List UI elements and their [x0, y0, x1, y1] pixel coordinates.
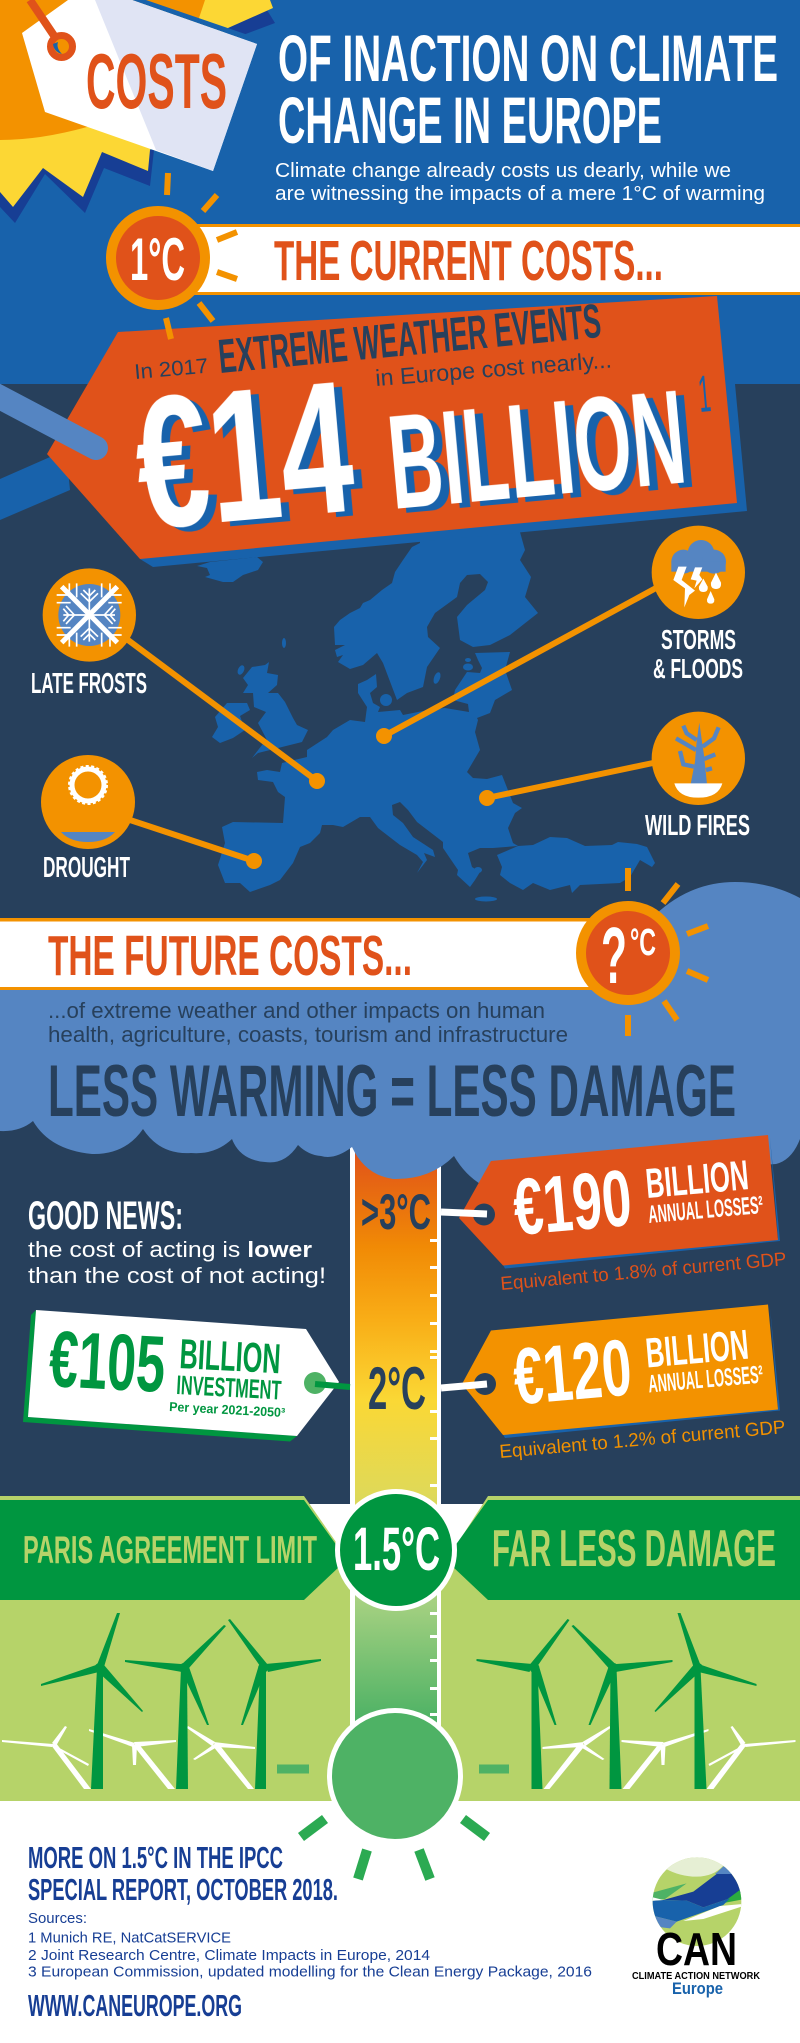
sun with costs price tag: COSTS: [86, 37, 227, 125]
icon: wild fires tree: [652, 712, 745, 805]
gdp note: 1.2%: Equivalent to 1.2% of current GDP: [499, 1417, 786, 1463]
label: storms and floods: STORMS: [661, 624, 736, 655]
price tag: extreme weather events: 1: [696, 365, 713, 424]
map of Europe: [197, 525, 655, 902]
more on 1.5°C heading: MORE ON 1.5°C IN THE IPCC: [28, 1840, 283, 1875]
wind turbines right: [476, 1613, 796, 1789]
sources: 2 Joint Research Centre, Climate Impacts in Europe, 2014: [28, 1947, 430, 1964]
thermometer lower tube: [350, 1590, 441, 1730]
wind turbines left: [2, 1613, 321, 1789]
price tag: 105 billion investment: €105: [47, 1314, 168, 1409]
price tag: extreme weather events: [0, 295, 747, 569]
subtitle: Climate change already costs us dearly, while we: [275, 160, 731, 182]
thermometer badge: ?°C: °C: [630, 922, 656, 964]
thermometer bulb and rays: [277, 1710, 509, 1879]
logo: CAN Europe: CLIMATE ACTION NETWORK: [632, 1970, 760, 1982]
good news text: the cost of acting is lower: [28, 1237, 312, 1262]
icon: late frosts snowflake: [43, 568, 136, 662]
sun with costs price tag: [0, 0, 275, 223]
temperature marks: 2°C: [368, 1355, 426, 1422]
good news text: [28, 1194, 326, 1288]
label: storms and floods: [653, 624, 743, 684]
thermometer badge: 1°C: 1°C: [130, 226, 185, 293]
price tag: extreme weather events: €14: [127, 341, 361, 569]
sources: [28, 1910, 592, 1980]
price tag: 105 billion investment: Per year 2021-2050³: [169, 1399, 286, 1420]
green field: [0, 1552, 800, 1801]
label: late frosts: LATE FROSTS: [31, 668, 147, 700]
future costs description: [48, 998, 568, 1047]
logo: CAN Europe: [632, 1855, 760, 1998]
price tag: 190 billion: [441, 1135, 780, 1268]
future costs description: ...of extreme weather and other impacts on human: [48, 998, 545, 1023]
price tag: 120 billion: €120: [510, 1322, 635, 1421]
sources: 1 Munich RE, NatCatSERVICE: [28, 1930, 231, 1946]
good news text: GOOD NEWS:: [28, 1194, 183, 1238]
sources: 3 European Commission, updated modelling for the Clean Energy Package, 2016: [28, 1964, 592, 1980]
price tag: extreme weather events: In 2017: [133, 355, 209, 384]
more on 1.5°C heading: [28, 1840, 338, 1907]
good news text: than the cost of not acting!: [28, 1263, 326, 1288]
label: drought: DROUGHT: [43, 852, 130, 884]
badge: 1.5°C: [338, 1492, 454, 1608]
title: [278, 21, 778, 157]
icon: storms and floods: [652, 526, 745, 619]
thermometer scale: [350, 1147, 441, 1727]
temperature marks: [361, 1184, 431, 1422]
callout lines and pins on the map: [128, 588, 656, 868]
logo: CAN Europe: CAN: [656, 1923, 737, 1975]
subtitle: [275, 160, 765, 205]
ribbon: paris agreement limit: [0, 1496, 345, 1600]
subtitle: are witnessing the impacts of a mere 1°C of warming: [275, 183, 765, 205]
thermometer badge: ?°C: [581, 868, 708, 1036]
price tag: 105 billion investment: INVESTMENT: [176, 1370, 282, 1406]
temperature marks: >3°C: [361, 1184, 431, 1240]
price tag: 190 billion: €190: [510, 1153, 635, 1252]
price tag: extreme weather events: in Europe cost nearly...: [374, 346, 613, 391]
banner: the future costs: THE FUTURE COSTS...: [48, 924, 412, 988]
ribbon: far less damage: [450, 1496, 800, 1600]
more on 1.5°C heading: SPECIAL REPORT, OCTOBER 2018.: [28, 1872, 338, 1907]
thermometer badge: 1°C: [111, 173, 237, 339]
price tag: 120 billion: [441, 1304, 780, 1438]
sources: Sources:: [28, 1910, 87, 1927]
ribbon: paris agreement limit: PARIS AGREEMENT LIMIT: [23, 1529, 317, 1572]
price tag: 105 billion investment: BILLION: [179, 1330, 282, 1382]
logo: CAN Europe: Europe: [672, 1979, 723, 1998]
future costs description: health, agriculture, coasts, tourism and infrastructure: [48, 1022, 568, 1047]
badge: 1.5°C: 1.5°C: [353, 1515, 440, 1583]
label: storms and floods: & FLOODS: [653, 653, 743, 684]
cloud: [0, 882, 800, 1185]
gdp note: 1.8%: Equivalent to 1.8% of current GDP: [500, 1249, 787, 1295]
thermometer badge: ?°C: ?: [601, 911, 627, 1000]
website: WWW.CANEUROPE.ORG: [28, 1988, 242, 2023]
price tag: 105 billion investment: [23, 1310, 350, 1442]
icon: drought sun: [41, 755, 135, 849]
